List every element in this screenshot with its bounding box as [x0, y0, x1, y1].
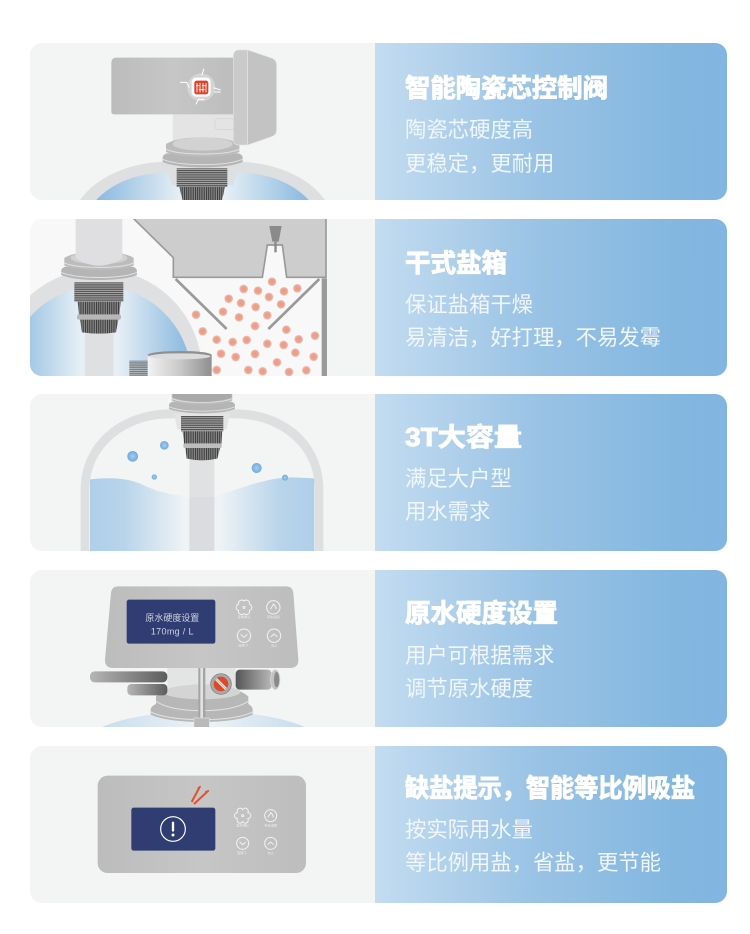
panel: hardness illustration background	[30, 570, 375, 727]
text block	[405, 293, 661, 350]
card 2: dry salt box	[30, 219, 727, 376]
panel: valve illustration background	[30, 43, 375, 200]
button labels: 手动/返回	[264, 822, 277, 827]
text block: 按实际用水量	[405, 818, 533, 842]
display: warning	[131, 808, 215, 851]
button labels: 向上	[271, 643, 277, 648]
panel: salt box text background	[375, 219, 727, 376]
touch buttons	[236, 600, 281, 642]
text block	[405, 644, 554, 701]
card 5: low salt alert	[30, 746, 727, 903]
button labels	[238, 614, 280, 648]
heading: 干式盐箱	[405, 250, 507, 278]
touch buttons	[234, 808, 277, 849]
panel: alert text background	[375, 746, 727, 903]
display: hardness setting: 原水硬度设置	[145, 612, 199, 623]
panel: alert illustration background	[30, 746, 375, 903]
salt hopper	[133, 218, 327, 378]
button labels: 选择/下	[237, 850, 247, 855]
panel: capacity text background	[375, 394, 727, 551]
text block: 保证盐箱干燥	[405, 293, 533, 317]
card 4: raw water hardness	[30, 570, 727, 731]
panel: hardness text background	[375, 570, 727, 727]
button labels: 向上	[268, 850, 274, 855]
heading: 原水硬度设置	[405, 600, 558, 628]
illustration: control valve on tank	[80, 50, 325, 203]
display: hardness setting: 170mg / L	[151, 626, 194, 636]
card 3: 3T capacity	[30, 389, 727, 553]
text block: 更稳定，更耐用	[405, 152, 554, 176]
text block	[405, 467, 512, 524]
text block	[405, 818, 661, 875]
illustration: alert control panel	[98, 776, 306, 873]
text block: 调节原水硬度	[405, 677, 533, 701]
text block: 用水需求	[405, 500, 490, 524]
heading: 智能陶瓷芯控制阀	[405, 75, 608, 103]
card 1: ceramic control valve	[30, 43, 727, 203]
text block: 用户可根据需求	[405, 644, 554, 668]
panel: valve text background	[375, 43, 727, 200]
icon: red alert sparks	[192, 786, 209, 804]
icon: red valve knob	[211, 674, 231, 694]
heading: 缺盐提示，智能等比例吸盐	[405, 775, 695, 803]
illustration: salt box and tank	[30, 219, 327, 376]
button labels: 手动/返回	[267, 614, 280, 619]
button labels: 菜单/确认	[236, 822, 249, 827]
illustration: valve control panel	[90, 586, 313, 731]
button labels	[236, 822, 277, 855]
text block	[405, 118, 554, 176]
icon: glowing chip	[180, 69, 221, 104]
button labels: 菜单/确认	[238, 614, 250, 619]
text block: 等比例用盐，省盐，更节能	[405, 851, 661, 875]
air bubbles	[127, 441, 288, 481]
text block: 满足大户型	[405, 467, 512, 491]
text block: 易清洁，好打理，不易发霉	[405, 326, 661, 350]
button labels: 选择/下	[238, 643, 248, 648]
display: hardness setting	[127, 600, 215, 644]
panel: salt box illustration background	[30, 219, 375, 376]
salt particles	[192, 277, 319, 376]
illustration: tank with water	[81, 389, 323, 553]
heading: 3T大容量	[405, 423, 522, 452]
panel: tank illustration background	[30, 394, 375, 551]
text block: 陶瓷芯硬度高	[405, 118, 533, 142]
